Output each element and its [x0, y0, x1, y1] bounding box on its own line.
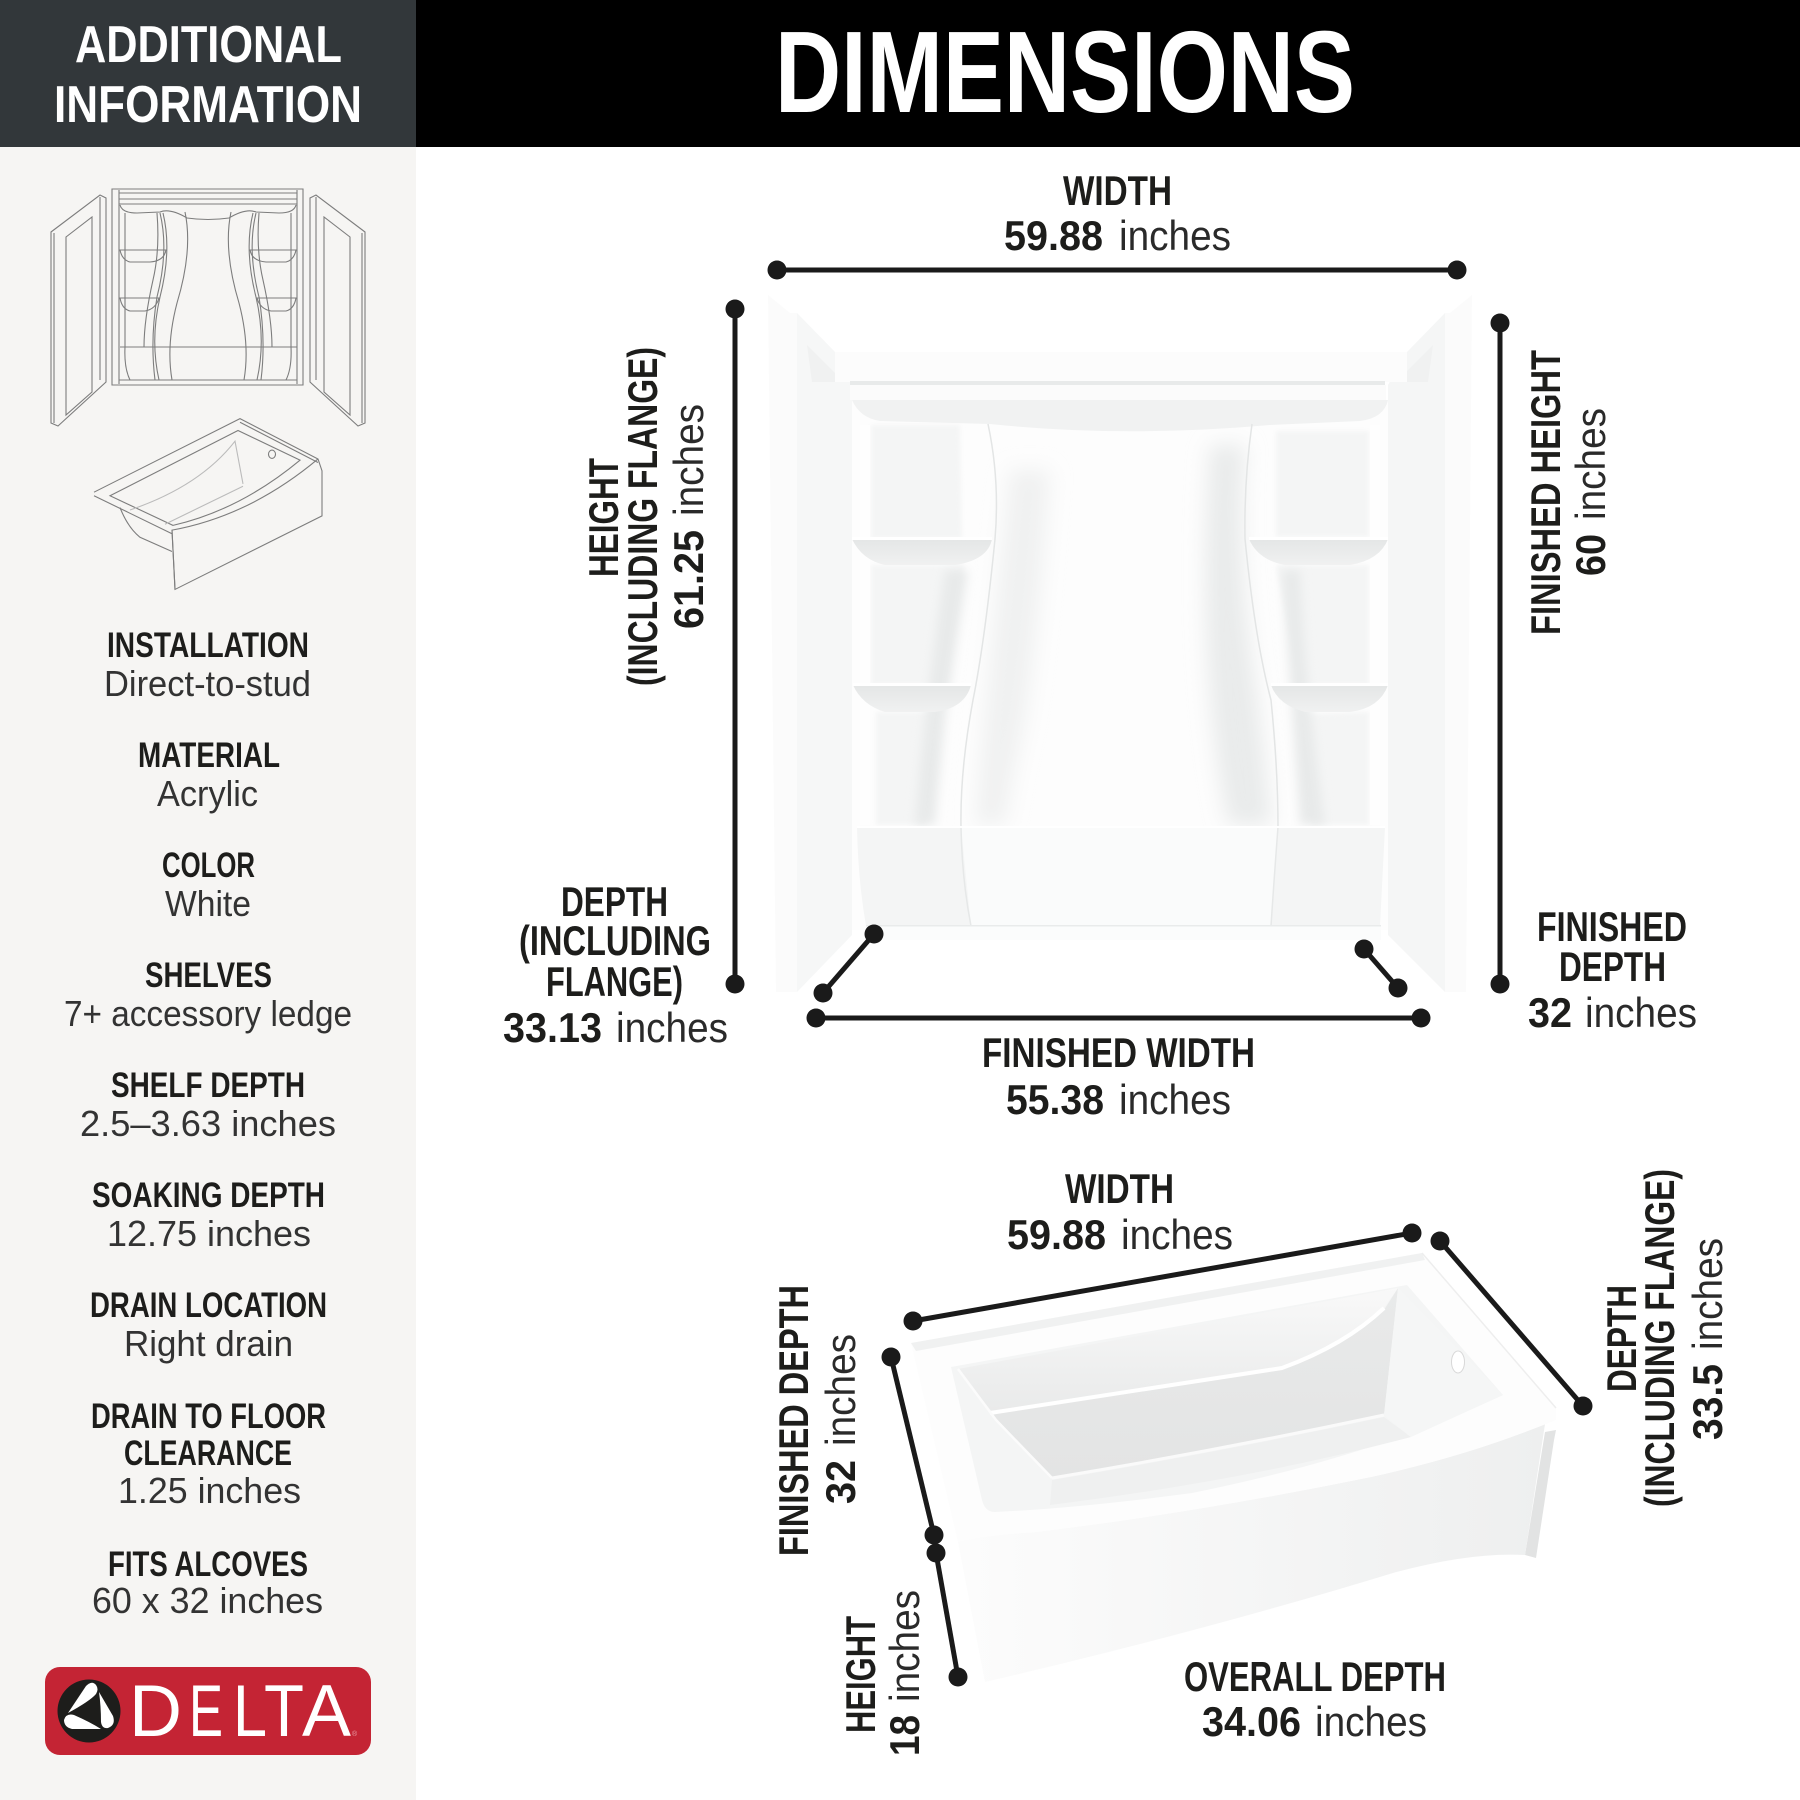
- basin upper ledge: [958, 1288, 1398, 1412]
- label: shower width: WIDTH: [1063, 167, 1172, 214]
- label: tub width: inches: [1121, 1211, 1233, 1258]
- soft shadows on back wall: [915, 570, 1325, 825]
- spec: soaking depth: SOAKING DEPTH: [92, 1176, 325, 1215]
- product: shower wall set: [768, 295, 1472, 992]
- label: shower width: 59.88: [1004, 212, 1103, 259]
- header: additional information: INFORMATION: [54, 76, 362, 134]
- label: shower width: inches: [1119, 212, 1231, 259]
- right side wall: [1388, 313, 1445, 992]
- label: tub height: HEIGHT: [837, 1616, 884, 1733]
- dimension: left depth: [814, 924, 884, 1002]
- label: finished depth: 32: [1528, 989, 1572, 1036]
- label: finished height: inches: [1567, 408, 1614, 520]
- label: finished height: FINISHED HEIGHT: [1522, 350, 1569, 635]
- logo: delta: L: [233, 1671, 267, 1752]
- logo: delta: A: [302, 1671, 351, 1752]
- right side panel: [310, 195, 365, 426]
- panel: sidebar background: [0, 146, 416, 1800]
- label: depth including flange: [503, 878, 728, 1051]
- label: tub finished depth: FINISHED DEPTH: [770, 1285, 817, 1556]
- basin back wall: [992, 1288, 1398, 1478]
- spec: shelves: SHELVES: [145, 956, 272, 995]
- label: finished height: [1522, 350, 1614, 635]
- label: height including flange: inches: [665, 404, 712, 516]
- left flange: [768, 295, 797, 992]
- label: tub depth including flange: 33.5: [1684, 1364, 1731, 1440]
- label: overall depth: [1184, 1653, 1446, 1745]
- label: height including flange: 61.25: [665, 530, 712, 629]
- label: depth including flange: (INCLUDING: [519, 917, 711, 964]
- logo: delta: T: [264, 1671, 304, 1752]
- label: tub width: 59.88: [1007, 1211, 1106, 1258]
- left side panel: [51, 195, 106, 426]
- logo: delta: E: [189, 1671, 223, 1752]
- spec: color: COLOR: [162, 846, 255, 885]
- spec: shelves: [64, 956, 352, 1034]
- label: tub finished depth: [770, 1285, 864, 1556]
- centre panel left waves: [153, 213, 167, 380]
- label: tub finished depth: 32: [817, 1460, 864, 1504]
- dimension: height including flange: [726, 300, 744, 994]
- label: depth including flange: inches: [616, 1004, 728, 1051]
- right flange: [1445, 295, 1472, 992]
- shelves: [852, 537, 1388, 712]
- label: finished width: inches: [1119, 1076, 1231, 1123]
- spec: drain to floor clearance: CLEARANCE: [124, 1434, 292, 1473]
- dimension: tub height: [926, 1544, 968, 1686]
- logo: delta: ®: [352, 1730, 358, 1738]
- header: dimensions title: DIMENSIONS: [775, 7, 1355, 137]
- spec: color: White: [165, 883, 251, 924]
- basin right wall: [1384, 1288, 1503, 1437]
- dimension: tub finished depth: [882, 1348, 944, 1544]
- label: height including flange: (INCLUDING FLANGE): [619, 347, 666, 686]
- logo: delta: [45, 1667, 371, 1755]
- label: tub height: 18: [881, 1715, 928, 1756]
- header: additional information: ADDITIONAL: [75, 16, 342, 74]
- label: finished depth: DEPTH: [1559, 943, 1666, 990]
- label: overall depth: 34.06: [1202, 1698, 1301, 1745]
- spec: shelves: 7+ accessory ledge: [64, 993, 352, 1034]
- dimension: tub width: [904, 1224, 1422, 1330]
- centre panel frame: [112, 189, 303, 385]
- label: tub width: WIDTH: [1065, 1165, 1174, 1212]
- label: depth including flange: DEPTH: [561, 878, 668, 925]
- apron: [958, 1424, 1545, 1682]
- spec list: [64, 626, 352, 1621]
- spec: fits alcoves: 60 x 32 inches: [92, 1580, 323, 1621]
- header: additional information: [0, 0, 416, 147]
- spec: fits alcoves: FITS ALCOVES: [108, 1545, 308, 1584]
- label: height including flange: HEIGHT: [580, 458, 627, 577]
- icon: exploded wall panels line drawing: [51, 189, 365, 426]
- left side wall: [797, 313, 852, 992]
- label: shower width: [1004, 167, 1231, 259]
- spec: color: [162, 846, 255, 924]
- label: tub height: inches: [881, 1590, 928, 1702]
- logo: delta: D: [129, 1671, 182, 1752]
- spec: material: Acrylic: [157, 773, 258, 814]
- label: finished height: 60: [1567, 534, 1614, 576]
- header: dimensions title: [416, 0, 1800, 147]
- dimension: right depth: [1354, 940, 1408, 998]
- spec: drain location: Right drain: [124, 1323, 293, 1364]
- centre panel right waves: [249, 213, 263, 380]
- wall pockets: [871, 425, 1369, 825]
- spec: soaking depth: [92, 1176, 325, 1254]
- spec: drain to floor clearance: [91, 1397, 326, 1511]
- spec: drain location: DRAIN LOCATION: [90, 1286, 327, 1325]
- centre panel shelves: [120, 250, 296, 262]
- spec: drain to floor clearance: 1.25 inches: [118, 1470, 301, 1511]
- basin: [951, 1285, 1503, 1512]
- spec: material: MATERIAL: [138, 736, 280, 775]
- back wall: [852, 400, 1388, 930]
- spec: drain location: [90, 1286, 327, 1364]
- basin floor: [1050, 1417, 1411, 1505]
- centre panel top shelf and curves: [120, 205, 296, 220]
- label: finished depth: FINISHED: [1537, 903, 1687, 950]
- dimension: shower width: [768, 260, 1466, 280]
- spec: material: [138, 736, 280, 814]
- ledge bevel: [990, 1308, 1384, 1413]
- label: tub width: [1007, 1165, 1233, 1258]
- spec: installation: Direct-to-stud: [104, 663, 311, 704]
- dimension: tub depth including flange: [1430, 1232, 1592, 1416]
- label: height including flange: [580, 347, 712, 686]
- label: finished width: FINISHED WIDTH: [982, 1029, 1255, 1076]
- curved centre panel edges: [961, 424, 996, 827]
- top shelf: [852, 400, 1388, 431]
- label: finished depth: [1528, 903, 1697, 1036]
- label: finished width: [982, 1029, 1255, 1123]
- dimension: finished height: [1490, 314, 1510, 994]
- label: tub depth including flange: (INCLUDING FLANGE): [1636, 1169, 1683, 1507]
- spec: installation: INSTALLATION: [107, 626, 309, 665]
- label: tub depth including flange: [1598, 1169, 1731, 1507]
- top band: [835, 352, 1407, 382]
- spec: shelf depth: SHELF DEPTH: [111, 1066, 305, 1105]
- spec: installation: [104, 626, 311, 704]
- tub ledge band: [857, 827, 1385, 926]
- dimension: finished width: [806, 1008, 1430, 1028]
- spec: shelf depth: [80, 1066, 336, 1144]
- label: tub depth including flange: inches: [1684, 1238, 1731, 1350]
- rim: [911, 1253, 1556, 1542]
- label: finished width: 55.38: [1006, 1076, 1104, 1123]
- label: depth including flange: 33.13: [503, 1004, 602, 1051]
- label: finished depth: inches: [1585, 989, 1697, 1036]
- product: bathtub: [911, 1253, 1556, 1682]
- label: depth including flange: FLANGE): [546, 958, 683, 1005]
- spec: shelf depth: 2.5–3.63 inches: [80, 1103, 336, 1144]
- spec: fits alcoves: [92, 1545, 323, 1621]
- label: tub finished depth: inches: [817, 1334, 864, 1446]
- label: overall depth: inches: [1315, 1698, 1427, 1745]
- apron side return: [1525, 1430, 1556, 1558]
- label: tub depth including flange: DEPTH: [1598, 1285, 1645, 1392]
- label: overall depth: OVERALL DEPTH: [1184, 1653, 1446, 1700]
- icon: bathtub line drawing: [94, 419, 322, 589]
- spec: soaking depth: 12.75 inches: [107, 1213, 311, 1254]
- label: tub height: [837, 1590, 928, 1756]
- spec: drain to floor clearance: DRAIN TO FLOOR: [91, 1397, 326, 1436]
